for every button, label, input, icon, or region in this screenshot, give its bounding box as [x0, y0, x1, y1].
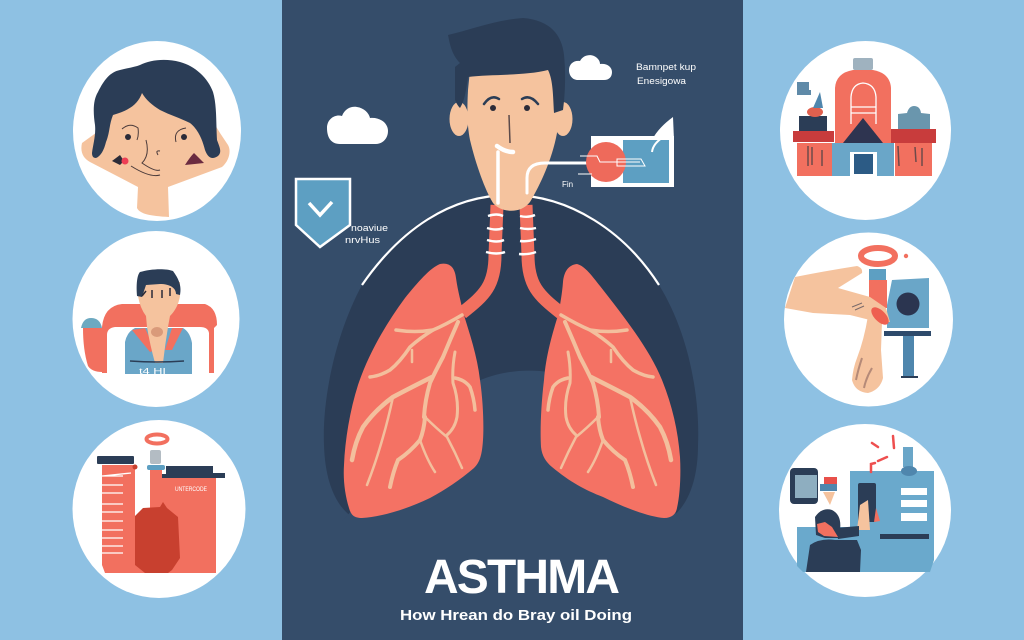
- left lung: [344, 264, 483, 518]
- neck and face: [138, 282, 180, 363]
- hair: [137, 269, 181, 297]
- menu bars: [901, 488, 927, 521]
- dark torso silhouette: [324, 195, 698, 517]
- left mouth corner: [112, 155, 128, 165]
- phone: [858, 483, 876, 522]
- lung body: [344, 264, 483, 518]
- shield label: [345, 223, 388, 245]
- device neck: [903, 447, 913, 467]
- red roof right: [891, 129, 936, 143]
- door frame: [850, 152, 877, 176]
- face: [467, 70, 557, 211]
- person hair: [815, 509, 840, 538]
- eyes and brows: [484, 97, 538, 111]
- white breathing tubes: [497, 146, 592, 203]
- blue machine: [797, 471, 934, 572]
- circle: man in bed: [72, 231, 240, 407]
- cloud left: [327, 107, 388, 144]
- bronchial veins: [548, 315, 671, 487]
- circle: inhaler machine: [72, 420, 246, 598]
- left device: [790, 468, 818, 504]
- knob: [901, 466, 917, 476]
- bed frame: [102, 304, 217, 373]
- cloud right: [569, 55, 612, 80]
- eyebrows and nose lines: [122, 125, 186, 176]
- coral accent: [817, 522, 838, 537]
- eyes: [125, 134, 187, 140]
- right wing: [895, 143, 932, 176]
- inhaler diagram card: [562, 117, 674, 189]
- dark roof: [843, 118, 883, 143]
- bottle cap: [853, 58, 873, 70]
- blue centre: [832, 143, 894, 176]
- dark box: [799, 116, 827, 131]
- label text: UNTERCODE: [175, 487, 207, 493]
- collar: [132, 328, 183, 352]
- subtitle: How Hrean do Bray oil Doing: [400, 607, 632, 624]
- blue cone: [813, 92, 823, 108]
- person head: [448, 18, 572, 313]
- circle: person at device: [779, 424, 951, 597]
- stacked blocks: [820, 477, 837, 505]
- shield label: noaviue: [351, 223, 388, 233]
- shirt text: t4 HI: [139, 367, 166, 376]
- small label top right: Bamnpet kup: [636, 62, 696, 72]
- hand: [857, 500, 870, 530]
- hair: [92, 60, 220, 158]
- door: [854, 154, 873, 174]
- arm: [836, 526, 859, 539]
- tower: [835, 70, 891, 143]
- shield label: nrvHus: [345, 235, 381, 245]
- grey-blue box: [898, 106, 930, 129]
- blue collar: [147, 465, 165, 470]
- title: ASTHMA: [424, 551, 620, 604]
- drop marks: [856, 358, 872, 388]
- ears: [450, 102, 572, 136]
- splashes: [871, 436, 894, 472]
- right mouth corner: [185, 153, 204, 165]
- person body: [806, 540, 861, 572]
- hair: [448, 18, 565, 113]
- white gauge lines: [102, 473, 131, 553]
- finger crease: [852, 303, 864, 310]
- trachea tube: [462, 205, 561, 313]
- blue device box: [887, 278, 929, 328]
- left cap: [97, 456, 134, 464]
- dark bottle: [135, 502, 180, 573]
- drop shape: [852, 316, 883, 393]
- hand: [785, 266, 890, 322]
- neck and shoulders: [81, 90, 230, 217]
- inhaler diagram card: Fin: [562, 180, 573, 189]
- inhaler body: [869, 269, 887, 308]
- fingernail: [868, 304, 892, 328]
- small label top right: [636, 62, 696, 86]
- circle background: [784, 232, 953, 406]
- side cylinder: [81, 318, 102, 372]
- circle background: [73, 41, 241, 221]
- ring handle: [146, 434, 168, 444]
- bronchial veins: [352, 315, 475, 487]
- circle background: [780, 41, 951, 220]
- lung body: [541, 264, 680, 518]
- dot: [904, 254, 908, 258]
- circle: pharmacy building: [780, 41, 951, 220]
- red roof left: [793, 131, 834, 142]
- shirt line: [130, 361, 184, 362]
- shirt: [125, 328, 192, 374]
- device neck: [150, 450, 161, 464]
- red blob: [807, 107, 823, 117]
- central dark panel: [282, 0, 743, 640]
- nose: [509, 115, 510, 143]
- circle background: [72, 420, 246, 598]
- ring handle: [861, 248, 895, 264]
- coral base blocks: [102, 465, 216, 573]
- dark bar: [880, 534, 929, 539]
- arch window: [851, 83, 876, 124]
- circle: hand with inhaler: [784, 232, 953, 406]
- small label top right: Enesigowa: [637, 76, 686, 86]
- device lens: [896, 292, 920, 316]
- wing marks: [808, 146, 922, 166]
- circle background: [779, 424, 951, 597]
- circle: woman face: [73, 41, 241, 221]
- left wing: [797, 143, 832, 176]
- throat mark: [151, 327, 163, 337]
- shield check icon: [296, 179, 350, 247]
- lower abdomen curve: [342, 371, 682, 521]
- circle background: [72, 231, 240, 407]
- coral strip: [874, 508, 880, 522]
- stack icon: [797, 82, 811, 95]
- right lung: [541, 264, 680, 518]
- eyes marks: [142, 288, 170, 298]
- right cap: [162, 466, 225, 478]
- T stand: [884, 331, 931, 378]
- white shoulder arc: [362, 195, 659, 285]
- red indicator: [132, 464, 138, 470]
